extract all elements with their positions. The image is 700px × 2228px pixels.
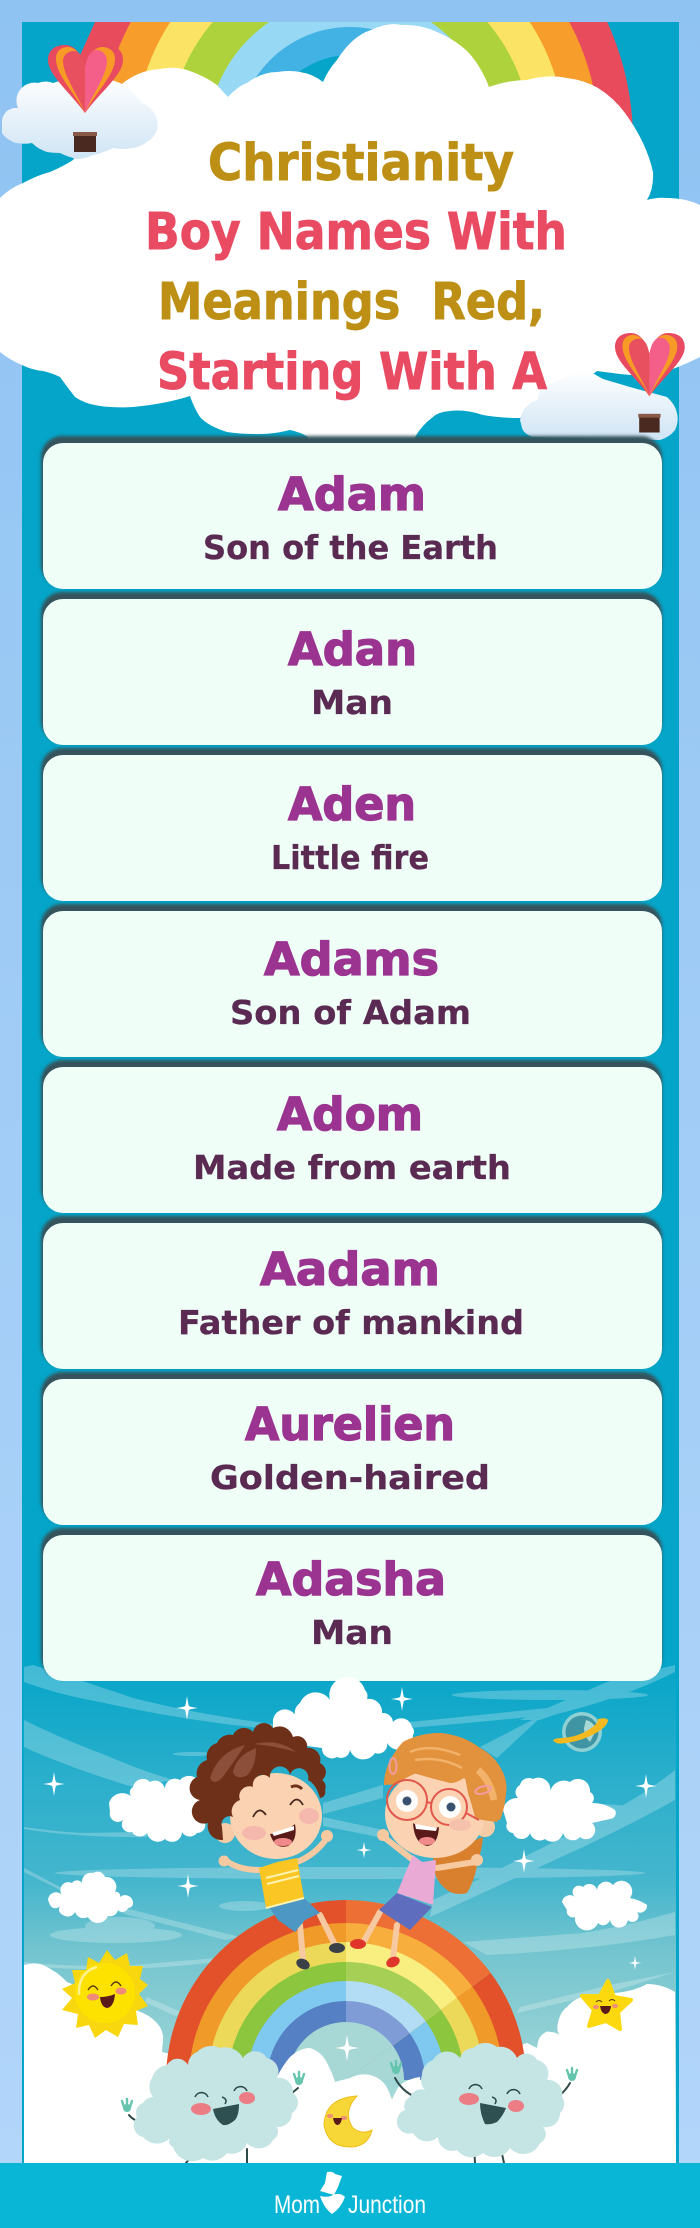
card: Adom: Made from earth <box>193 1148 511 1187</box>
title: Starting With A <box>157 343 547 402</box>
character: boy <box>190 1723 345 1971</box>
title <box>145 134 567 402</box>
character: right cloud <box>391 2043 577 2163</box>
card: Adom: Adom <box>277 1088 423 1141</box>
logo: MomJunction: Mom <box>274 2191 320 2219</box>
clouds: white mounds under rainbow arch <box>270 2048 425 2163</box>
rainbow <box>166 1900 524 2080</box>
card: Adan: Adan <box>288 623 417 676</box>
card: Adan <box>41 592 662 745</box>
card: Aden: Little fire <box>271 838 429 877</box>
card: Aadam <box>41 1216 662 1369</box>
icon: sun <box>62 1950 148 2038</box>
card: Aden <box>41 748 662 901</box>
card: Adasha <box>41 1528 662 1681</box>
card: Adam: Son of the Earth <box>203 528 498 567</box>
card: Adam <box>41 436 662 589</box>
icon: planet <box>553 1712 608 1752</box>
card: Adan: Man <box>311 683 393 722</box>
header illustration: rainbow <box>80 22 633 124</box>
title: Christianity <box>208 134 514 193</box>
logo: MomJunction: Junction <box>348 2191 426 2219</box>
card: Aurelien <box>41 1372 662 1525</box>
card: Aadam: Father of mankind <box>178 1303 524 1342</box>
title: Meanings Red, <box>158 273 545 332</box>
card: Aurelien: Golden-haired <box>210 1458 490 1497</box>
card: Adam: Adam <box>278 468 426 521</box>
character: girl <box>350 1733 506 1969</box>
icon: sparkle under rainbow <box>335 2035 359 2061</box>
card: Adams <box>41 904 662 1057</box>
character: left cloud <box>122 2046 304 2163</box>
icon: star <box>582 1981 631 2029</box>
header cloud <box>0 24 700 445</box>
limbs <box>228 1838 335 1960</box>
card: Adams: Son of Adam <box>230 993 471 1032</box>
sky streaks <box>24 1665 675 2016</box>
card: Aurelien: Aurelien <box>245 1398 455 1451</box>
card: Adams: Adams <box>264 933 439 986</box>
icon: heart balloon left <box>48 45 123 152</box>
card: Adasha: Adasha <box>256 1553 446 1606</box>
logo: MomJunction <box>274 2172 426 2219</box>
card: Aden: Aden <box>288 778 416 831</box>
icon: moon <box>324 2096 372 2147</box>
cloud: lower right <box>520 370 678 440</box>
title: Boy Names With <box>145 203 567 262</box>
card: Adom <box>41 1060 662 1213</box>
icon: sparkles <box>43 1687 657 1970</box>
scene background: sky <box>24 1665 676 2163</box>
card: Aadam: Aadam <box>260 1243 440 1296</box>
clouds: white ground <box>24 1964 676 2163</box>
clouds: small white <box>48 1677 647 1930</box>
card: Adasha: Man <box>311 1613 393 1652</box>
icon: heart balloon right <box>615 333 685 433</box>
cloud: top left <box>2 76 158 159</box>
footer band <box>0 2163 700 2228</box>
